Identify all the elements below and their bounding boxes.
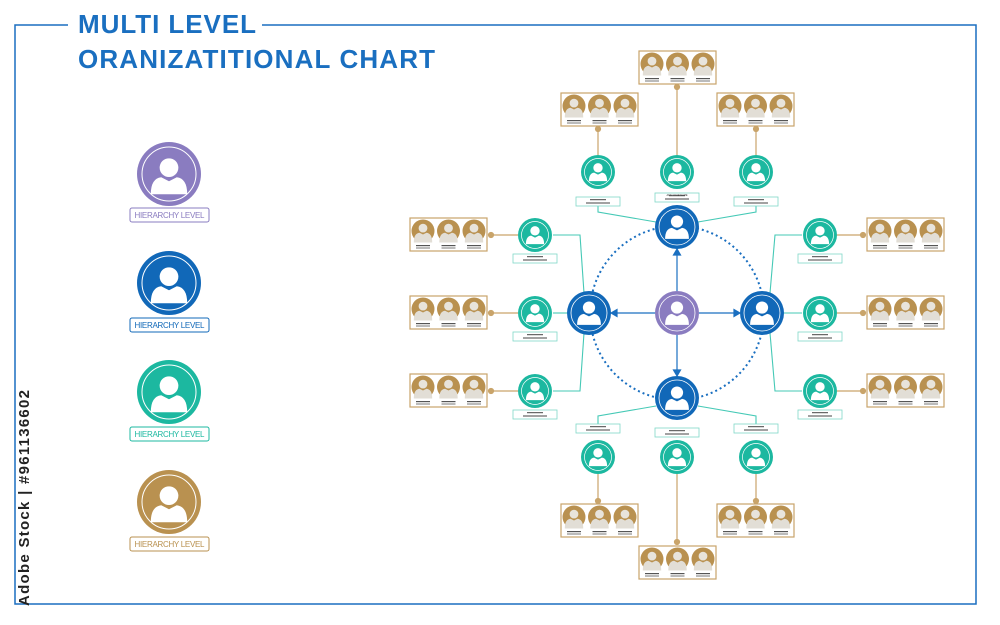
legend: gold level: [130, 470, 209, 551]
title: ORANIZATITIONAL CHART: [78, 44, 435, 74]
watermark credit: Adobe Stock | #961136602: [16, 390, 33, 606]
teal nodes: [518, 155, 837, 474]
blue nodes: [567, 205, 784, 420]
legend: blue level: HIERARCHY LEVEL: [134, 321, 205, 330]
title: MULTI LEVEL: [78, 9, 256, 39]
center node: [655, 291, 699, 335]
legend: teal level: HIERARCHY LEVEL: [134, 430, 205, 439]
teal name labels: ADD YOUR NAME: [666, 194, 688, 197]
connectors teal: [553, 205, 802, 424]
teal name labels: [513, 193, 842, 437]
connectors gold: [488, 84, 866, 545]
legend: blue level: [130, 251, 209, 332]
legend: purple level: [130, 142, 209, 222]
dotted circle: [590, 226, 764, 400]
legend: gold level: HIERARCHY LEVEL: [134, 540, 205, 549]
gold team boxes: [410, 51, 944, 579]
legend: purple level: HIERARCHY LEVEL: [134, 211, 205, 220]
arrows: [611, 249, 740, 376]
org chart: [410, 51, 944, 579]
legend: teal level: [130, 360, 209, 441]
title: [78, 9, 435, 74]
